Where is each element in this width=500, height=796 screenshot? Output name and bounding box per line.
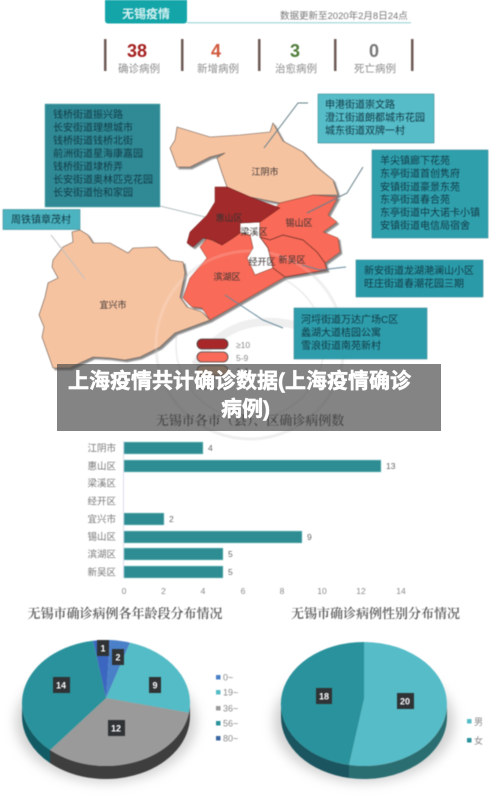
callout: Binhu cases <box>294 308 427 359</box>
age legend: 56~ <box>223 718 238 728</box>
watermark seal <box>156 251 344 439</box>
stats row <box>104 39 414 75</box>
map regions <box>39 123 340 368</box>
stats row: 0 <box>369 41 379 61</box>
stats row: 新增病例 <box>197 62 239 75</box>
age legend: 0~ <box>223 672 233 682</box>
map region labels: 经开区 <box>248 256 276 267</box>
region: Xinwu <box>260 235 327 277</box>
callout: Yixing case: 周铁镇章茂村 <box>11 213 71 226</box>
x axis labels: 6 <box>241 586 246 596</box>
x axis labels: 0 <box>122 586 127 596</box>
category labels: 梁溪区 <box>87 478 116 490</box>
pie value labels: 2 <box>115 652 121 662</box>
pie chart: age distribution <box>16 640 196 782</box>
region: Jiangyin <box>170 123 338 203</box>
header tab <box>105 0 411 24</box>
stats row: 3 <box>290 41 300 61</box>
pie side <box>281 704 447 779</box>
pie value labels: 9 <box>152 680 158 690</box>
age legend <box>216 672 238 744</box>
gender legend: 男 <box>474 717 483 727</box>
slice female <box>281 642 364 765</box>
age chart title: 无锡市确诊病例各年龄段分布情况 <box>27 606 223 621</box>
map region labels <box>99 166 313 310</box>
age legend: 19~ <box>223 688 238 698</box>
callout: Xinwu cases: 新安街道龙湖滟澜山小区 <box>364 264 474 277</box>
callout: Xishan cases: 羊尖镇廊下花苑 <box>380 154 450 167</box>
callout: Huishan cases: 钱桥街道埭桥弄 <box>53 160 123 173</box>
stats row: 死亡病例 <box>354 62 396 75</box>
pie value labels <box>316 688 414 709</box>
pie value labels: 14 <box>56 680 66 690</box>
region: Xishan <box>260 195 340 263</box>
gender legend <box>467 717 483 746</box>
pie value labels: 20 <box>400 696 410 706</box>
slice 36~ <box>50 698 189 766</box>
region: Liangxi and Jingkai <box>240 222 273 275</box>
callout: Xishan cases: 东亭街道首创隽府 <box>380 167 460 180</box>
slice 0~ <box>106 640 130 698</box>
category labels: 锡山区 <box>87 531 116 543</box>
callout: Huishan cases: 长安街道奥林匹克花园 <box>53 173 153 186</box>
map region labels: 宜兴市 <box>99 299 127 310</box>
map region labels: 新吴区 <box>278 254 306 265</box>
x axis labels: 4 <box>201 586 206 596</box>
x axis labels: 14 <box>396 586 406 596</box>
pie value labels: 1 <box>100 644 106 654</box>
value labels: 4 <box>208 443 213 453</box>
map region labels: 滨湖区 <box>213 271 241 282</box>
pie value labels: 12 <box>111 724 121 734</box>
bar chart title: 无锡市各市（县）、区确诊病例数 <box>156 413 344 428</box>
map region labels: 锡山区 <box>285 218 313 228</box>
map legend: 1-4 <box>236 366 249 376</box>
callout: Jiangyin cases: 申港街道崇文路 <box>325 98 395 111</box>
callout: Xishan cases <box>372 150 488 238</box>
slice male <box>349 642 447 766</box>
page title overlay banner <box>57 364 441 431</box>
age legend: 36~ <box>223 704 238 714</box>
callout: Jiangyin cases: 城东街道双牌一村 <box>325 124 405 137</box>
callout: Binhu cases: 雪浪街道南苑新村 <box>301 339 381 352</box>
value labels: 13 <box>386 461 396 471</box>
x axis labels: 12 <box>356 586 366 596</box>
callout: Binhu cases: 蠡湖大道桔园公寓 <box>301 326 381 339</box>
map of Wuxi <box>39 123 344 439</box>
callout: Huishan cases: 钱桥街道振兴路 <box>53 108 123 121</box>
stats row: 38 <box>127 41 147 61</box>
callout: Jiangyin cases <box>318 94 434 143</box>
callout: Huishan cases: 长安街道怡和家园 <box>53 186 133 199</box>
category labels: 江阴市 <box>87 442 116 454</box>
bars <box>124 442 381 578</box>
age legend: 80~ <box>223 734 238 744</box>
pie side <box>22 703 190 779</box>
slice 80~ <box>93 640 110 698</box>
value labels: 2 <box>169 514 174 524</box>
category labels: 宜兴市 <box>87 514 116 526</box>
update date note: 数据更新至2020年2月8日24点 <box>280 10 408 22</box>
leader lines <box>51 103 363 328</box>
category labels: 惠山区 <box>87 460 116 472</box>
callout: Jiangyin cases: 澄江街道朗都城市花园 <box>325 111 425 124</box>
slice 56~ <box>22 641 106 750</box>
map region labels: 梁溪区 <box>240 226 268 237</box>
region: Binhu <box>183 233 285 320</box>
map legend <box>197 339 250 389</box>
category labels: 新吴区 <box>87 566 116 578</box>
region: Huishan <box>187 187 280 247</box>
map watermark tint <box>156 251 344 439</box>
stats row: 4 <box>211 41 221 61</box>
x axis labels: 2 <box>161 586 166 596</box>
x axis labels: 10 <box>317 586 327 596</box>
callout: Huishan cases: 钱桥街道钱桥北街 <box>53 134 133 147</box>
region: Yixing <box>39 230 210 368</box>
x axis labels: 8 <box>280 586 285 596</box>
slice 19~ <box>106 643 190 713</box>
value labels: 5 <box>228 549 233 559</box>
stats row: 确诊病例 <box>118 62 160 75</box>
callout: Xishan cases: 东亭街道中大诺卡小镇 <box>380 206 480 219</box>
value labels <box>169 443 396 577</box>
stats row: 治愈病例 <box>275 62 317 75</box>
callout: Huishan cases <box>45 104 160 207</box>
title line one: 上海疫情共计确诊数据(上海疫情确诊 <box>68 370 411 393</box>
value labels: 5 <box>228 567 233 577</box>
callout: Huishan cases: 前洲街道星海康嘉园 <box>53 147 143 160</box>
pie chart: gender distribution <box>274 642 454 782</box>
map legend: 5-9 <box>236 353 249 363</box>
callout: Xinwu cases: 旺庄街道春潮花园三期 <box>364 277 464 290</box>
map region labels: 惠山区 <box>215 212 243 223</box>
map region labels: 江阴市 <box>251 166 279 177</box>
category labels: 滨湖区 <box>87 548 116 560</box>
gender legend: 女 <box>474 735 483 746</box>
callout: Binhu cases: 河埒街道万达广场C区 <box>301 313 398 326</box>
map legend: ≥10 <box>236 340 250 350</box>
callout: Xishan cases: 安镇街道豪景东苑 <box>380 180 460 194</box>
callout: Huishan cases: 长安街道理想城市 <box>53 121 133 134</box>
value labels: 9 <box>307 532 312 542</box>
header tab: 无锡疫情 <box>122 6 170 21</box>
callout: Yixing case <box>3 210 80 230</box>
x axis labels <box>122 586 406 596</box>
callout: Xishan cases: 安镇街道电信局宿舍 <box>380 219 470 232</box>
callout: Xinwu cases <box>356 260 483 297</box>
title line two: 病例) <box>221 398 270 421</box>
bar chart: cases by district <box>87 441 406 596</box>
pie value labels: 18 <box>319 692 329 702</box>
category labels: 经开区 <box>87 496 116 508</box>
category labels <box>87 442 116 578</box>
callout: Xishan cases: 东亭街道春合苑 <box>380 193 450 206</box>
gender chart title: 无锡市确诊病例性别分布情况 <box>291 606 460 621</box>
pie value labels <box>53 640 161 736</box>
